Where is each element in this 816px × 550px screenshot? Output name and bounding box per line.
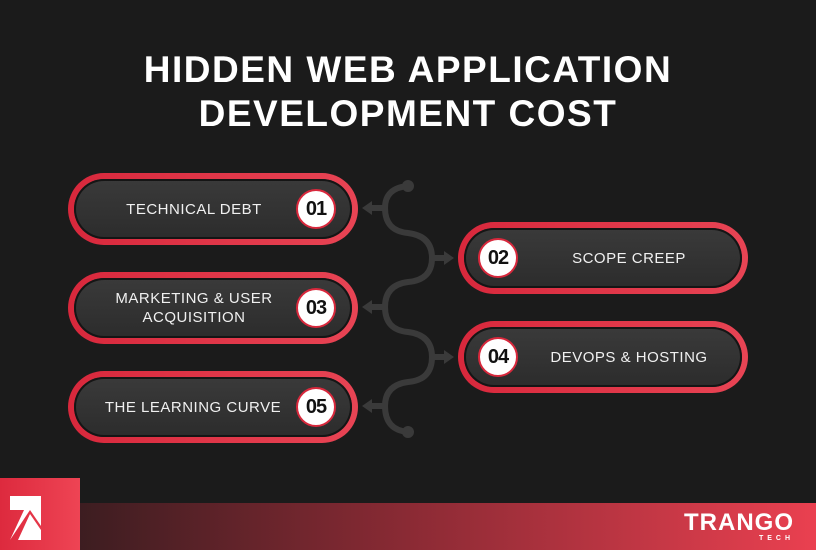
- pill 01: TECHNICAL DEBT: [126, 200, 262, 218]
- pill 02: SCOPE CREEP: [572, 250, 686, 266]
- footer bar: [0, 503, 816, 550]
- brand logo: TRANGO: [684, 509, 794, 536]
- pill 02: 02: [488, 246, 508, 268]
- title: DEVELOPMENT COST: [199, 93, 617, 134]
- title: [144, 49, 672, 134]
- pill 01: [68, 173, 358, 245]
- pill 03: 03: [306, 296, 326, 318]
- title: HIDDEN WEB APPLICATION: [144, 49, 672, 90]
- pill 03: ACQUISITION: [142, 309, 246, 326]
- pill 03: [68, 272, 358, 344]
- logo square: [0, 478, 80, 550]
- pill 04: DEVOPS & HOSTING: [550, 348, 708, 366]
- pill 04: [458, 321, 748, 393]
- pill 04: 04: [488, 346, 508, 368]
- pill 05: [68, 371, 358, 443]
- brand logo: TECH: [759, 535, 794, 542]
- pill 05: 05: [306, 396, 326, 418]
- pill 01: 01: [306, 198, 326, 220]
- pill 03: MARKETING & USER: [115, 290, 273, 307]
- pill 05: THE LEARNING CURVE: [105, 398, 281, 416]
- pill 02: [458, 222, 748, 294]
